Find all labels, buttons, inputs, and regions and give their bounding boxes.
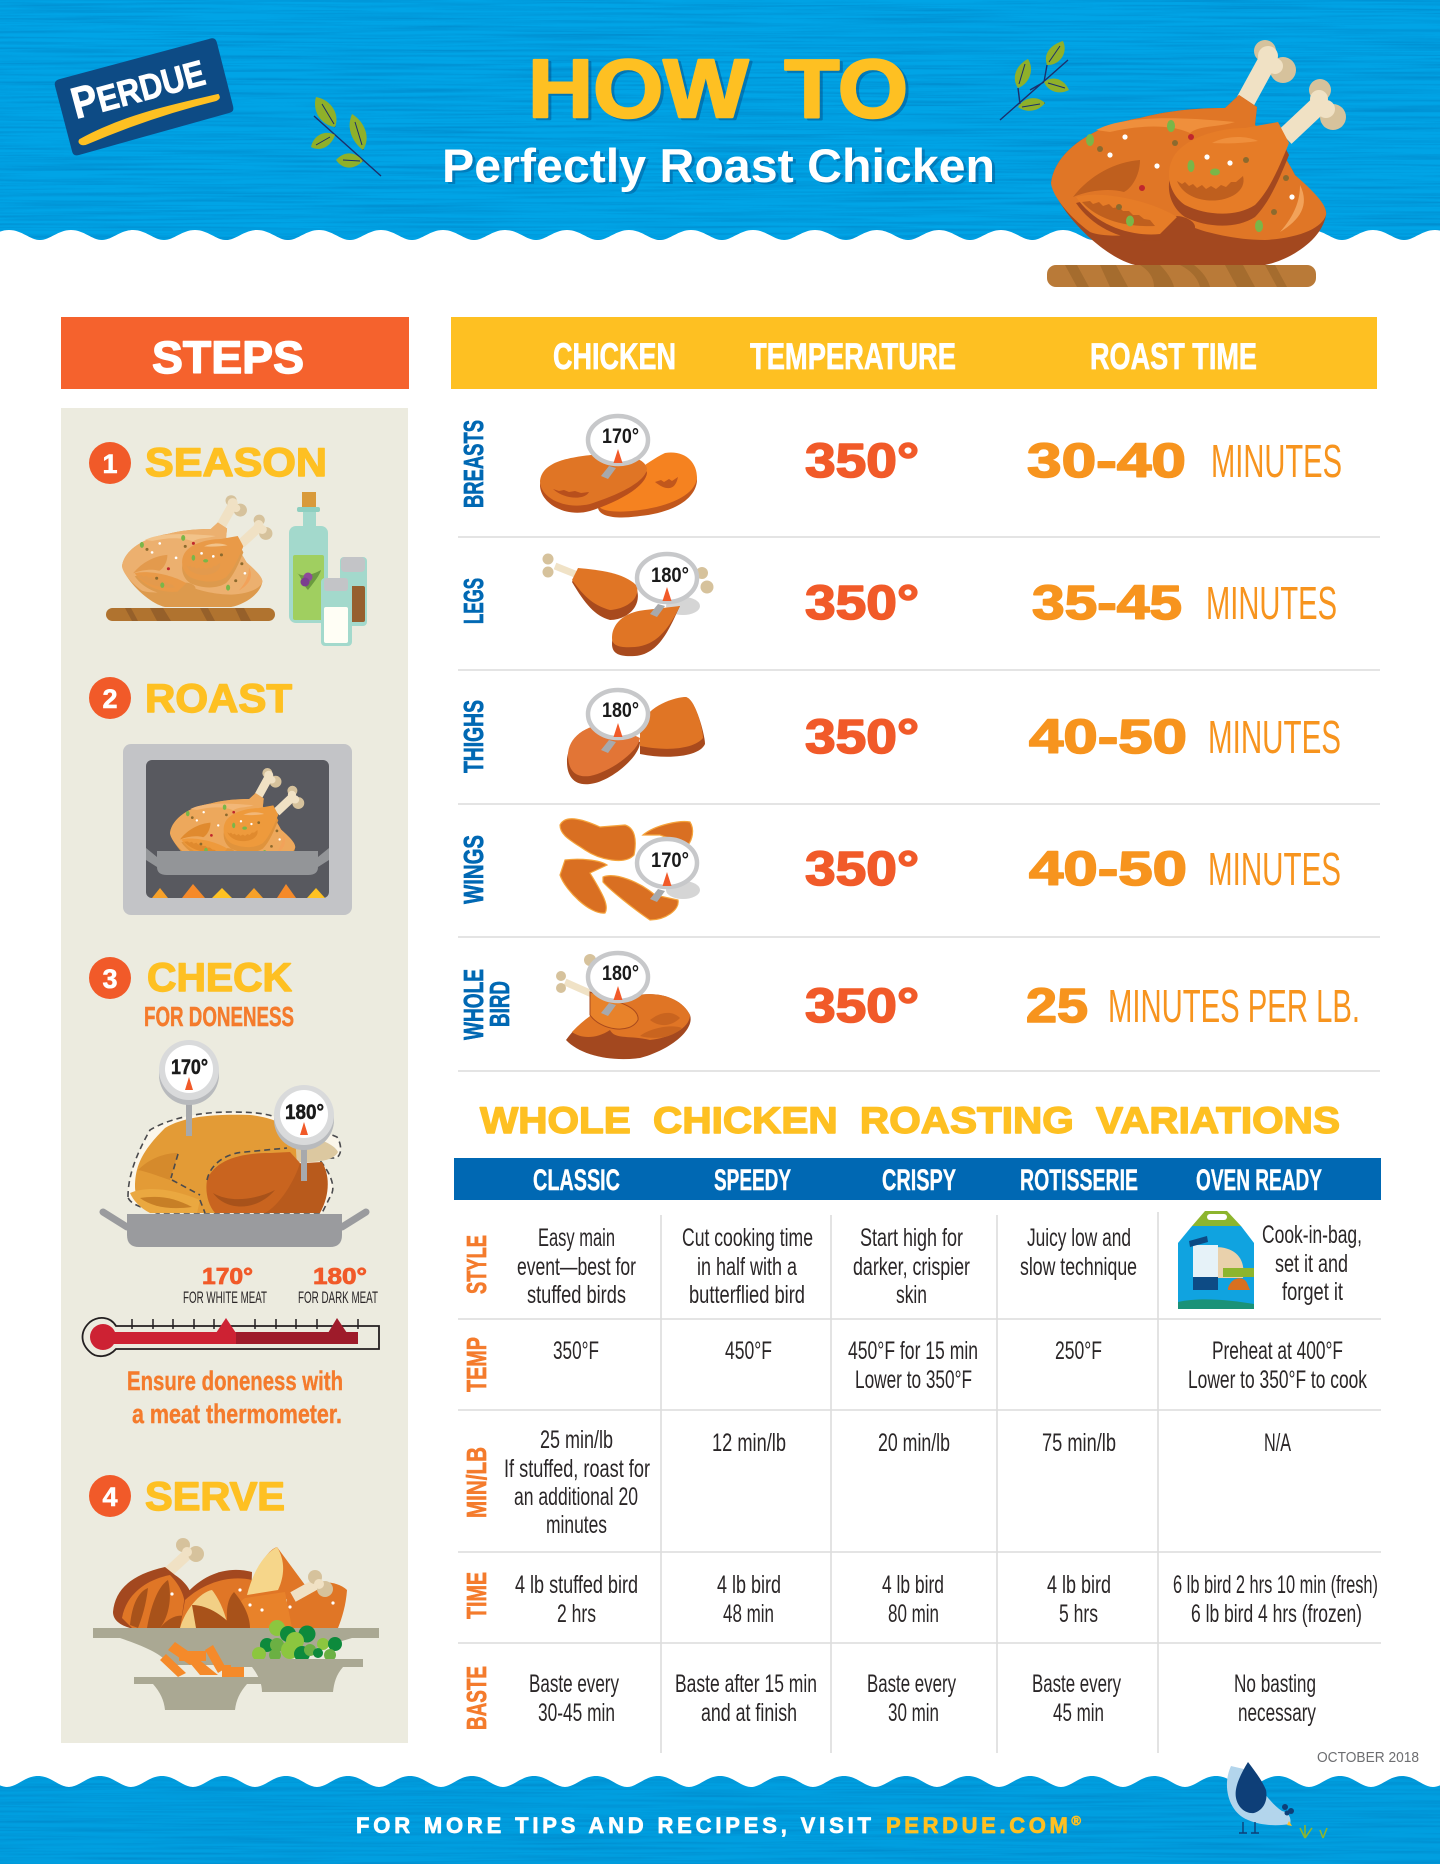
baste cells: necessary	[1238, 1699, 1316, 1727]
row: thighs	[458, 690, 1341, 784]
row label: TIME	[461, 1572, 492, 1619]
row: time	[461, 1571, 1378, 1628]
icon: whole bird with thermometer	[556, 953, 691, 1059]
min per lb cells: N/A	[1264, 1429, 1291, 1457]
footer text: visit perdue.com: PERDUE.COM	[886, 1813, 1068, 1838]
dial: 170: 170°	[171, 1056, 208, 1079]
heading: STEPS bar: STEPS	[152, 332, 304, 383]
temp cells: 350°F	[553, 1337, 599, 1365]
panel: steps background	[61, 408, 408, 1743]
icon: seasoned chicken on board	[106, 495, 275, 621]
roast time: 30-40	[1027, 435, 1186, 488]
icon: right herb sprig	[1000, 41, 1069, 120]
row label: WINGS	[458, 835, 489, 904]
row label: WHOLE	[458, 969, 489, 1040]
roast time: 40-50	[1029, 711, 1187, 764]
heading: STEPS bar	[61, 317, 409, 389]
heading: season: SEASON	[145, 441, 327, 485]
time cells: 4 lb stuffed bird	[515, 1571, 638, 1599]
row label: BASTE	[461, 1666, 492, 1730]
style cells: stuffed birds	[527, 1281, 626, 1309]
roast time: MINUTES	[1206, 577, 1337, 629]
temp cells: Lower to 350°F	[855, 1366, 972, 1394]
icon: oven with chicken	[123, 744, 352, 915]
row label: TEMP	[461, 1337, 492, 1392]
subheading: for doneness: FOR DONENESS	[144, 1001, 294, 1032]
roast time: MINUTES	[1211, 435, 1342, 487]
time cells	[515, 1571, 1378, 1628]
badge: 4	[89, 1475, 131, 1517]
table header: variations: SPEEDY	[714, 1164, 791, 1197]
labels: white and dark meat temperatures: FOR WHITE MEAT	[183, 1288, 267, 1307]
min per lb cells: an additional 20	[514, 1483, 638, 1511]
badge: 3: 3	[102, 964, 118, 994]
baste cells: and at finish	[701, 1699, 797, 1727]
footer text: visit perdue.com: FOR MORE TIPS AND RECIPES, VISIT	[356, 1813, 872, 1838]
time cells: 5 hrs	[1059, 1600, 1098, 1628]
icon: thighs with thermometer: 180°	[602, 699, 639, 722]
temp cells: 450°F	[725, 1337, 772, 1365]
table header: variations: CLASSIC	[533, 1164, 620, 1197]
style cells: Cook-in-bag,	[1262, 1221, 1362, 1249]
min per lb cells: If stuffed, roast for	[504, 1455, 650, 1483]
roast time	[1026, 980, 1360, 1033]
icon: breasts with thermometer: 170°	[602, 425, 639, 448]
style cells: Start high for	[860, 1224, 963, 1252]
icon: oven ready bag	[1178, 1211, 1254, 1309]
logo: Perdue: PERDUE	[66, 46, 210, 129]
time cells: 4 lb bird	[717, 1571, 781, 1599]
date note: OCTOBER 2018	[1317, 1749, 1419, 1766]
table header: chicken, temperature, roast time	[451, 317, 1377, 389]
row label: STYLE	[461, 1235, 492, 1294]
baste cells: Baste after 15 min	[675, 1670, 817, 1698]
style cells: Cut cooking time	[682, 1224, 813, 1252]
heading: roast: ROAST	[145, 677, 292, 721]
row label: LEGS	[458, 578, 489, 624]
heading: whole chicken roasting variations: WHOLE CHICKEN ROASTING VARIATIONS	[480, 1100, 1340, 1141]
icon: hero roast chicken on board	[1047, 40, 1346, 287]
time cells: 2 hrs	[557, 1600, 596, 1628]
icon: legs with thermometer	[542, 554, 714, 656]
icon: pecking bird	[1227, 1762, 1327, 1838]
step 1: season	[89, 441, 367, 646]
note: ensure doneness	[127, 1366, 343, 1429]
min per lb cells	[504, 1426, 1291, 1539]
roast time: MINUTES	[1208, 711, 1341, 763]
table header: chicken, temperature, roast time: ROAST TIME	[1090, 336, 1257, 377]
table header: variations: OVEN READY	[1196, 1164, 1322, 1197]
step 4: serve	[89, 1475, 379, 1710]
baste cells: 30 min	[888, 1699, 939, 1727]
badge: 2	[89, 677, 131, 719]
temp cells: Preheat at 400°F	[1212, 1337, 1343, 1365]
style cells: Juicy low and	[1027, 1224, 1131, 1252]
temperature: 350°	[805, 980, 919, 1033]
temperature: 350°	[805, 435, 919, 488]
row label	[458, 969, 515, 1040]
row: baste	[461, 1666, 1316, 1730]
table grid lines	[458, 1212, 1381, 1753]
badge: 1	[89, 442, 131, 484]
min per lb cells: 20 min/lb	[878, 1429, 950, 1457]
baste cells: 45 min	[1053, 1699, 1104, 1727]
badge: 4: 4	[102, 1482, 118, 1512]
badge: 2: 2	[102, 684, 118, 714]
illustration: chicken in pan with thermometers	[103, 1040, 366, 1247]
temperature: 350°	[805, 577, 919, 630]
temperature: 350°	[805, 843, 919, 896]
temp cells: 250°F	[1055, 1337, 1102, 1365]
baste cells	[529, 1670, 1316, 1727]
row: temp	[461, 1337, 1367, 1394]
row label: MIN/LB	[461, 1447, 492, 1518]
icon: legs with thermometer: 180°	[651, 564, 689, 587]
style cells: event—best for	[517, 1253, 636, 1281]
table header: chicken, temperature, roast time: CHICKEN	[553, 336, 676, 377]
roast time: 40-50	[1029, 843, 1187, 896]
row: breasts	[458, 416, 1342, 517]
roast time: 25	[1026, 980, 1088, 1033]
baste cells: 30-45 min	[538, 1699, 615, 1727]
footer text: visit perdue.com: ®	[1071, 1813, 1081, 1828]
min per lb cells: minutes	[546, 1511, 607, 1539]
row label: BREASTS	[458, 420, 489, 508]
icon: oil bottle and shakers	[289, 492, 367, 646]
style cells: darker, crispier	[853, 1253, 970, 1281]
labels: white and dark meat temperatures	[183, 1263, 378, 1307]
baste cells: Baste every	[529, 1670, 619, 1698]
step 3: check	[82, 956, 379, 1429]
baste cells: No basting	[1234, 1670, 1316, 1698]
labels: white and dark meat temperatures: FOR DARK MEAT	[298, 1288, 378, 1307]
temp cells	[553, 1337, 1367, 1394]
badge: 3	[89, 957, 131, 999]
heading: serve: SERVE	[145, 1475, 285, 1519]
style cells: skin	[896, 1281, 927, 1309]
roast time	[1027, 435, 1342, 488]
time cells: 6 lb bird 4 hrs (frozen)	[1191, 1600, 1362, 1628]
logo: Perdue	[55, 38, 233, 155]
title: HOW TO: HOW TO	[528, 42, 908, 135]
roast time: MINUTES	[1208, 843, 1341, 895]
icon: wings with thermometer: 170°	[651, 849, 689, 872]
roast time	[1029, 711, 1341, 764]
labels: white and dark meat temperatures: 170°	[202, 1263, 253, 1289]
style cells: in half with a	[697, 1253, 797, 1281]
temp cells: 450°F for 15 min	[848, 1337, 978, 1365]
row dividers	[458, 537, 1380, 1071]
table header: chicken, temperature, roast time: TEMPERATURE	[750, 336, 956, 377]
time cells: 48 min	[723, 1600, 774, 1628]
gauge: thermometer	[82, 1318, 379, 1356]
step 2: roast	[89, 677, 352, 915]
style cells: slow technique	[1020, 1253, 1137, 1281]
labels: white and dark meat temperatures: 180°	[313, 1263, 367, 1289]
row: whole bird	[458, 953, 1360, 1059]
illustration: carved chicken with sides	[93, 1538, 379, 1710]
time cells: 80 min	[888, 1600, 939, 1628]
style cells: forget it	[1282, 1278, 1343, 1306]
time cells: 4 lb bird	[882, 1571, 944, 1599]
row: wings	[458, 819, 1341, 920]
row: min per lb	[461, 1426, 1291, 1539]
row: style	[461, 1211, 1362, 1309]
baste cells: Baste every	[1032, 1670, 1121, 1698]
badge: 1: 1	[102, 449, 118, 479]
icon: thighs with thermometer	[567, 690, 705, 784]
icon: whole bird with thermometer: 180°	[602, 962, 639, 985]
roast time	[1032, 577, 1337, 630]
dial: 180: 180°	[285, 1101, 324, 1124]
style cells: butterflied bird	[689, 1281, 805, 1309]
min per lb cells: 12 min/lb	[712, 1429, 786, 1457]
table header: variations: ROTISSERIE	[1020, 1164, 1138, 1197]
roast time	[1029, 843, 1341, 896]
icon: left herb sprig	[311, 97, 381, 176]
heading: check: CHECK	[147, 956, 292, 1000]
style cells	[517, 1221, 1362, 1309]
icon: breasts with thermometer	[540, 416, 697, 517]
table header: variations: CRISPY	[882, 1164, 956, 1197]
style cells: set it and	[1275, 1250, 1348, 1278]
min per lb cells: 25 min/lb	[540, 1426, 613, 1454]
subtitle: Perfectly Roast Chicken: Perfectly Roast Chicken	[442, 139, 995, 192]
note: ensure doneness: Ensure doneness with	[127, 1366, 343, 1396]
temperature: 350°	[805, 711, 919, 764]
header band: blue wood texture	[0, 0, 1440, 245]
row label: THIGHS	[458, 700, 489, 773]
roast time: 35-45	[1032, 577, 1182, 630]
footer band: blue wood texture	[0, 1770, 1440, 1864]
table header: variations	[454, 1158, 1381, 1200]
baste cells: Baste every	[867, 1670, 956, 1698]
temp cells: Lower to 350°F to cook	[1188, 1366, 1367, 1394]
min per lb cells: 75 min/lb	[1042, 1429, 1116, 1457]
time cells: 4 lb bird	[1047, 1571, 1111, 1599]
note: ensure doneness: a meat thermometer.	[132, 1399, 342, 1429]
row label: BIRD	[484, 981, 515, 1027]
style cells: Easy main	[538, 1224, 615, 1252]
icon: wings with thermometer	[560, 819, 700, 920]
row: legs	[458, 554, 1337, 656]
